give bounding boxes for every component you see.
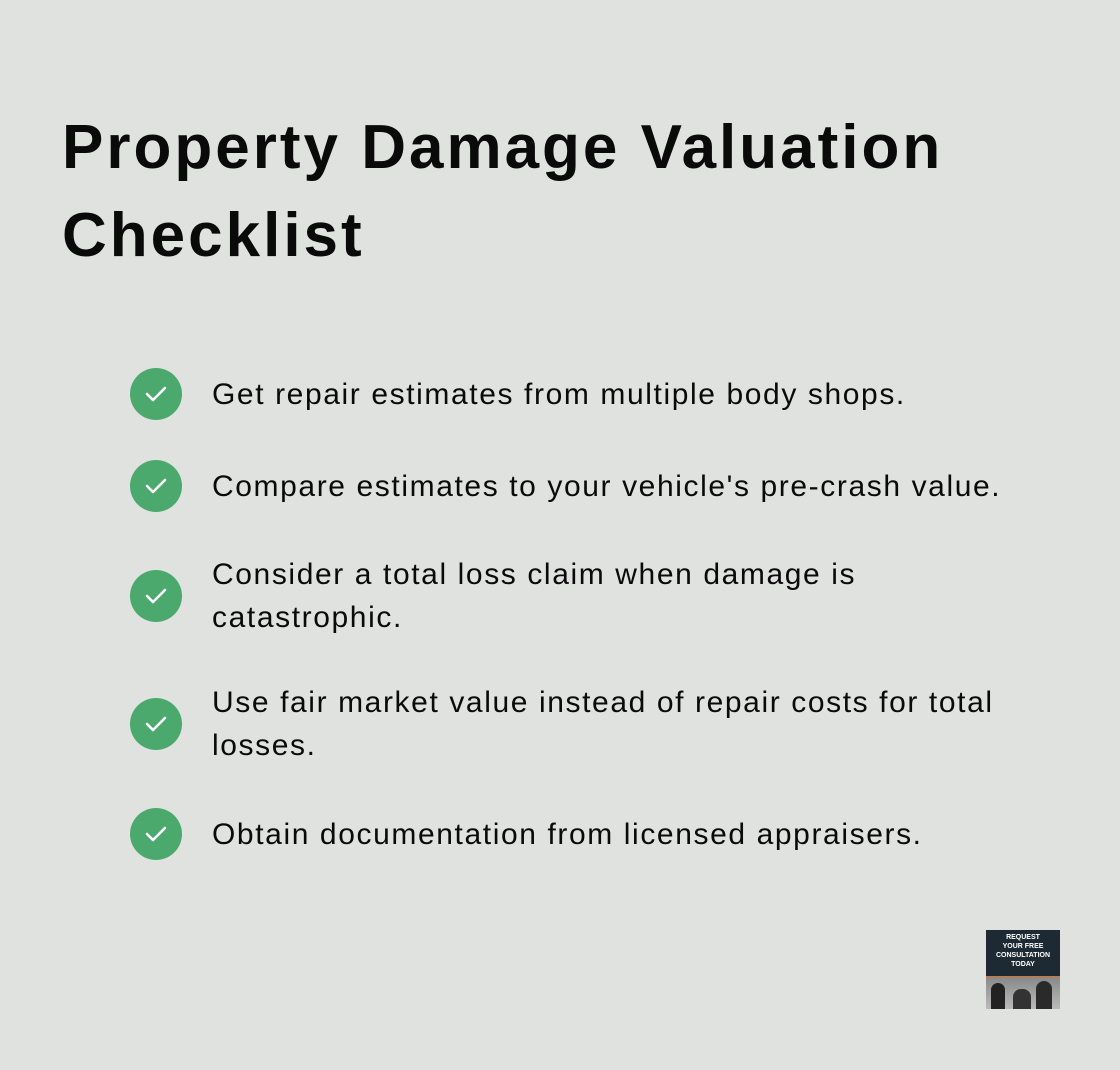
badge text: CONSULTATION bbox=[996, 952, 1050, 959]
item 1: Get repair estimates from multiple body shops. bbox=[212, 378, 906, 410]
item 3: catastrophic. bbox=[212, 601, 403, 634]
item 3 bbox=[130, 558, 856, 634]
icon: check bbox=[130, 698, 182, 750]
badge text: YOUR FREE bbox=[1003, 943, 1043, 950]
item 4: losses. bbox=[212, 729, 317, 762]
badge photo bbox=[986, 977, 1060, 1009]
badge text bbox=[996, 934, 1050, 968]
item 4: Use fair market value instead of repair costs for total bbox=[212, 686, 994, 719]
item 4 bbox=[130, 686, 994, 762]
item 3: Consider a total loss claim when damage is bbox=[212, 558, 856, 591]
icon: check bbox=[130, 460, 182, 512]
icon: check bbox=[130, 808, 182, 860]
icon: check bbox=[130, 368, 182, 420]
badge text: TODAY bbox=[1011, 961, 1035, 968]
badge: consultation bbox=[986, 930, 1060, 1009]
title bbox=[62, 113, 943, 270]
title: Checklist bbox=[62, 201, 365, 270]
title: Property Damage Valuation bbox=[62, 113, 943, 182]
badge text: REQUEST bbox=[1006, 934, 1040, 941]
item 5 bbox=[130, 808, 923, 860]
item 2: Compare estimates to your vehicle's pre-crash value. bbox=[212, 470, 1001, 502]
item 5: Obtain documentation from licensed appraisers. bbox=[212, 818, 923, 850]
item 1 bbox=[130, 368, 906, 420]
icon: check bbox=[130, 570, 182, 622]
item 2 bbox=[130, 460, 1001, 512]
